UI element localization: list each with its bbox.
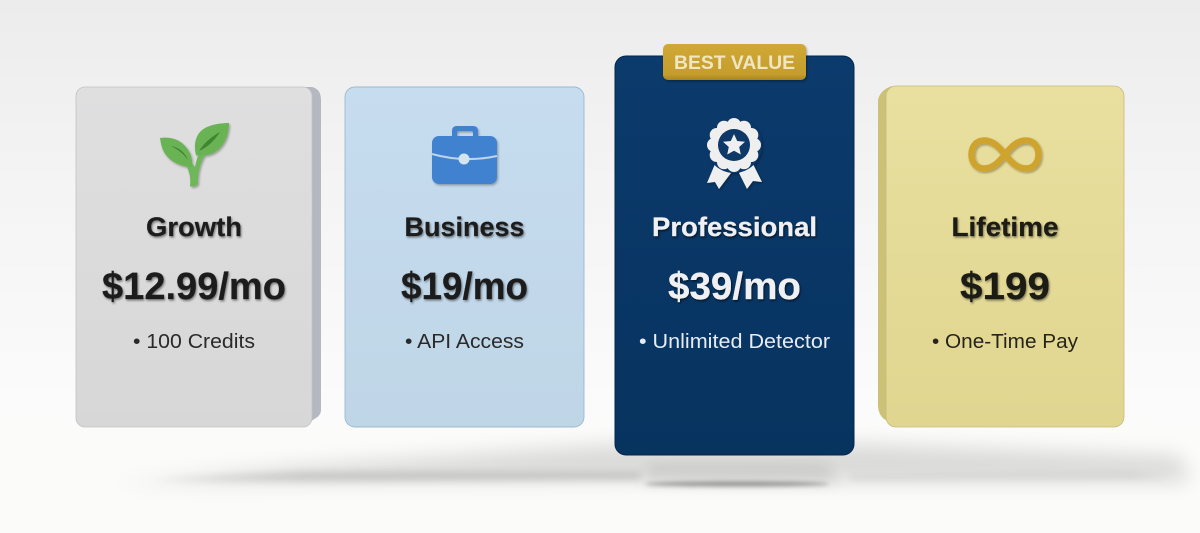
card face (76, 87, 312, 427)
card face (345, 87, 584, 427)
heading: Professional: Professional (652, 212, 817, 242)
feature: Growth: • 100 Credits (133, 331, 255, 353)
price: Growth: $12.99/mo (102, 266, 286, 308)
icon: award rosette (706, 117, 762, 189)
badge: Best Value (663, 44, 806, 80)
panel: Growth (76, 87, 321, 427)
feature: Lifetime: • One-Time Pay (932, 331, 1078, 353)
feature: Business: • API Access (405, 331, 524, 353)
panel: Professional (615, 44, 854, 455)
card side (878, 86, 897, 427)
price: Professional: $39/mo (668, 266, 801, 308)
feature: Professional: • Unlimited Detector (639, 331, 830, 353)
icon: infinity (972, 140, 1038, 168)
card side (300, 87, 321, 427)
card face (615, 56, 854, 455)
heading: Business: Business (404, 212, 524, 242)
price: Business: $19/mo (401, 266, 528, 308)
icon: sprout (160, 123, 229, 187)
panel: Lifetime (878, 86, 1124, 427)
heading: Lifetime: Lifetime (952, 212, 1058, 242)
badge: Best Value: BEST VALUE (674, 53, 795, 74)
price: Lifetime: $199 (960, 266, 1050, 308)
icon: briefcase (432, 126, 497, 184)
heading: Growth: Growth (146, 212, 242, 242)
floor shadows (110, 444, 1190, 486)
panel: Business (345, 87, 584, 427)
card face (886, 86, 1124, 427)
